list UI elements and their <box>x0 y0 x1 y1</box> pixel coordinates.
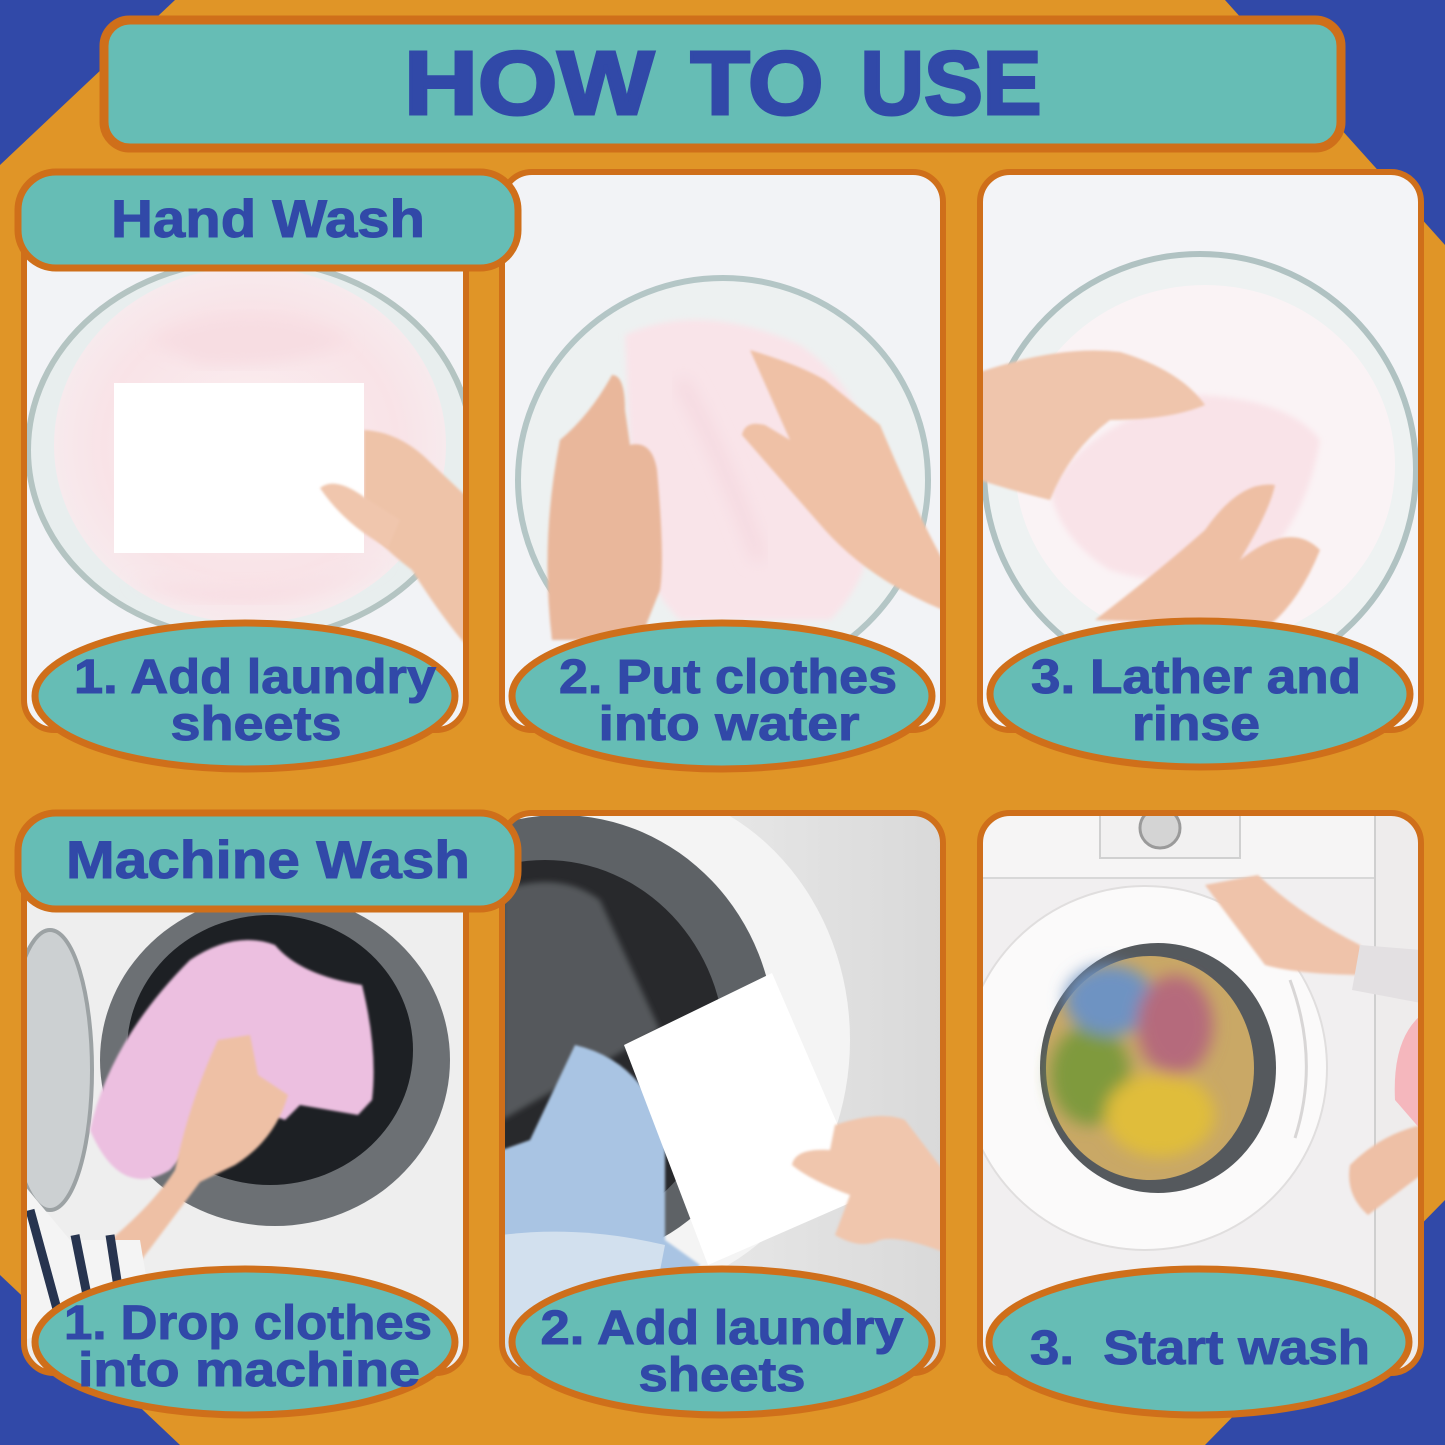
panel: machine wash step 1 photo <box>21 894 469 1376</box>
panel: hand wash step 1 photo <box>21 252 469 733</box>
heading: Hand Wash: Hand Wash <box>111 190 425 249</box>
title: TO <box>690 34 824 134</box>
label: step 2 add laundry sheets <box>512 1269 932 1415</box>
panel: hand wash step 3 photo <box>980 172 1421 730</box>
title <box>404 34 1042 134</box>
label: step 1 drop clothes into machine: into machine <box>78 1344 420 1397</box>
label: step 3 start wash: 3. Start wash <box>1030 1322 1370 1375</box>
label: step 1 add laundry sheets <box>35 623 455 769</box>
label: step 3 lather and rinse <box>990 621 1410 767</box>
label: step 2 put clothes into water: into water <box>598 698 860 751</box>
blurred laundry <box>1050 965 1215 1157</box>
heading: Hand Wash <box>18 172 518 268</box>
blue clothes <box>505 1044 701 1269</box>
label: step 3 start wash <box>989 1269 1409 1415</box>
label: step 3 lather and rinse: rinse <box>1132 698 1260 751</box>
left hand <box>548 375 662 640</box>
title: HOW <box>404 34 654 134</box>
heading: Machine Wash <box>18 813 518 909</box>
right hand <box>742 350 943 610</box>
label: step 1 drop clothes into machine <box>35 1269 455 1415</box>
label: step 1 add laundry sheets: sheets <box>170 698 342 751</box>
label: step 1 drop clothes into machine: 1. Drop clothes <box>64 1297 432 1350</box>
label: step 2 add laundry sheets: sheets <box>638 1349 806 1402</box>
title banner <box>104 20 1341 148</box>
lower hand <box>1349 1125 1421 1215</box>
white sheet <box>624 973 868 1265</box>
pink cloth <box>90 940 374 1179</box>
label: step 2 put clothes into water <box>512 623 932 769</box>
hand <box>364 430 470 650</box>
title: USE <box>860 34 1042 134</box>
label: step 1 add laundry sheets: 1. Add laundry <box>74 651 436 704</box>
heading: Machine Wash: Machine Wash <box>66 831 470 890</box>
label: step 3 lather and rinse: 3. Lather and <box>1031 651 1361 704</box>
lower hand <box>1095 485 1320 625</box>
lace cuff <box>1352 945 1421 1003</box>
label: step 2 put clothes into water: 2. Put clothes <box>559 651 897 704</box>
hand <box>792 1116 943 1252</box>
panel: machine wash step 2 photo <box>499 810 946 1376</box>
upper hand <box>980 351 1205 500</box>
panel: hand wash step 2 photo <box>502 172 943 730</box>
arm <box>114 1034 289 1260</box>
upper arm <box>1205 875 1370 975</box>
panel: machine wash step 3 photo <box>963 808 1421 1373</box>
striped sleeve <box>27 1188 144 1264</box>
label: step 2 add laundry sheets: 2. Add laundry <box>540 1302 904 1355</box>
